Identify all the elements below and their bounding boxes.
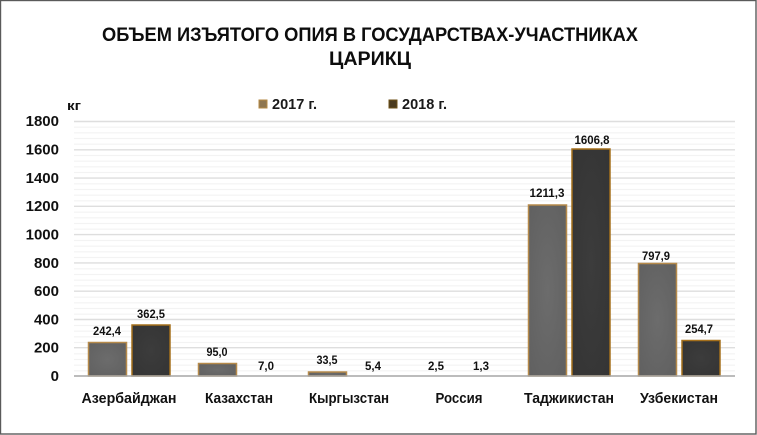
category labels: Кыргызстан: [309, 390, 389, 407]
data labels: [93, 133, 713, 373]
y axis labels: 800: [34, 255, 59, 272]
title: [102, 25, 638, 70]
y axis labels: [26, 113, 59, 385]
y axis labels: 1600: [26, 142, 59, 158]
title: ЦАРИКЦ: [329, 49, 411, 70]
y axis labels: 600: [34, 283, 59, 300]
y axis labels: 1200: [26, 198, 59, 215]
legend: [259, 96, 447, 113]
data labels: 95,0: [206, 345, 228, 359]
category labels: Казахстан: [205, 390, 273, 407]
data labels: 797,9: [642, 249, 670, 263]
group: Таджикистан: [528, 149, 610, 376]
legend item: 2018: 2018 г.: [402, 96, 447, 113]
data labels: 1,3: [473, 359, 489, 373]
data labels: 2,5: [428, 359, 444, 373]
bar: Казахстан 2017: [198, 364, 236, 376]
data labels: 1606,8: [574, 133, 610, 147]
title: ОБЪЕМ ИЗЪЯТОГО ОПИЯ В ГОСУДАРСТВАХ-УЧАСТНИКАХ: [102, 25, 638, 46]
y axis labels: 1000: [26, 226, 59, 244]
group: Азербайджан: [88, 325, 170, 376]
data labels: 7,0: [258, 359, 274, 373]
bar chart: [88, 149, 720, 376]
y axis labels: 1800: [26, 113, 59, 130]
data labels: 5,4: [365, 359, 381, 373]
data labels: 362,5: [137, 307, 165, 321]
data labels: 242,4: [93, 324, 121, 338]
y axis labels: 400: [34, 312, 59, 328]
y axis labels: 200: [34, 340, 59, 356]
y axis labels: 1400: [26, 170, 59, 187]
data labels: 33,5: [316, 353, 338, 367]
category labels: Узбекистан: [640, 390, 718, 407]
category labels: [82, 390, 718, 407]
category labels: Россия: [436, 390, 482, 407]
data labels: 1211,3: [530, 186, 565, 200]
group: Узбекистан: [638, 264, 720, 376]
bar: Кыргызстан 2017: [308, 372, 346, 376]
category labels: Таджикистан: [524, 390, 614, 407]
y axis labels: 0: [51, 368, 59, 385]
legend item: 2017: 2017 г.: [272, 96, 317, 113]
data labels: 254,7: [685, 322, 713, 336]
category labels: Азербайджан: [82, 390, 176, 407]
axis unit label: кг: [67, 98, 82, 113]
